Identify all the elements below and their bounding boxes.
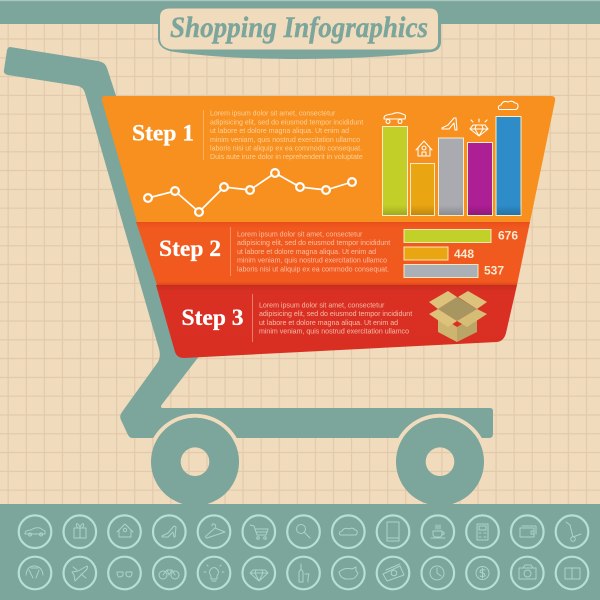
icon: magnifier bbox=[287, 515, 320, 548]
icon: camera bbox=[511, 557, 544, 589]
horizontal bar chart: 448 bbox=[454, 247, 474, 261]
step 1 text: minim veniam, quis nostrud exercitation ullamco bbox=[210, 137, 360, 144]
step 3 text: ut labore et dolore magna aliqua. Ut enim ad bbox=[259, 320, 398, 327]
icon: shoe bbox=[153, 515, 186, 548]
icon: wallet bbox=[511, 515, 544, 548]
step 1 heading: Step 1 bbox=[132, 120, 194, 146]
panel: step 1 bbox=[102, 96, 555, 222]
icon: clock bbox=[422, 557, 454, 589]
line chart bbox=[144, 169, 356, 216]
step 3 text: adipisicing elit, sed do eiusmod tempor incididunt bbox=[259, 311, 412, 318]
top banner band bbox=[0, 0, 600, 24]
icon: cloud bbox=[498, 101, 518, 110]
step 1 text: Duis aute irure dolor in reprehenderit in voluptate bbox=[210, 154, 363, 161]
step 1 text: adipisicing elit, sed do eiusmod tempor incididunt bbox=[210, 119, 363, 126]
shopping cart silhouette bbox=[4, 47, 493, 508]
icon: cloud bbox=[332, 515, 365, 548]
panel: step 3 bbox=[156, 285, 517, 358]
icon: bottle and glasses bbox=[287, 557, 320, 589]
left wheel bbox=[151, 418, 239, 506]
icon: parachute bbox=[19, 557, 51, 589]
step 1 text: laboris nisi ut aliquip ex ea commodo consequat. bbox=[210, 146, 362, 152]
icon: hand truck bbox=[556, 515, 588, 548]
icon: banknotes bbox=[377, 557, 409, 589]
icon: car bbox=[19, 515, 51, 548]
step 3 text: Lorem ipsum dolor sit amet, consectetur bbox=[259, 302, 385, 310]
icon: bicycle bbox=[153, 557, 186, 589]
icon: calculator bbox=[466, 515, 499, 548]
icon: shopping cart bbox=[242, 515, 275, 548]
step 2 text: ut labore et dolore magna aliqua. Ut enim ad bbox=[237, 249, 376, 256]
horizontal bar chart bbox=[404, 228, 518, 278]
horizontal bar chart: 537 bbox=[484, 264, 504, 278]
footer icon band bbox=[0, 504, 600, 600]
step 2 text: minim veniam, quis nostrud exercitation ullamco bbox=[237, 258, 387, 265]
step 2 heading: Step 2 bbox=[159, 236, 221, 262]
icon: piggy bank bbox=[332, 557, 365, 589]
icon: house bbox=[108, 515, 141, 548]
panel: step 2 bbox=[136, 222, 530, 285]
icon: dollar coin bbox=[466, 557, 499, 589]
step 2 text: adipisicing elit, sed do eiusmod tempor incididunt bbox=[237, 240, 390, 247]
icon: house bbox=[416, 141, 432, 156]
title text: Shopping Infographics bbox=[170, 11, 428, 44]
icon: shoe bbox=[442, 118, 457, 130]
icon row 2 bbox=[19, 557, 588, 589]
icon row 1 bbox=[19, 515, 588, 548]
right wheel bbox=[396, 418, 484, 506]
icon: hanger bbox=[198, 515, 230, 548]
step 3 text: minim veniam, quis nostrud exercitation ullamco bbox=[259, 329, 409, 336]
icon: car bbox=[384, 113, 406, 123]
icon: open book bbox=[556, 557, 588, 589]
icon: tablet bbox=[377, 515, 409, 548]
step 1 text: Lorem ipsum dolor sit amet, consectetur bbox=[210, 111, 336, 118]
title plaque bbox=[158, 8, 441, 59]
icon: diamond bbox=[242, 557, 275, 589]
icon: sunglasses bbox=[108, 557, 141, 589]
step 1 text: ut labore et dolore magna aliqua. Ut enim ad bbox=[210, 128, 349, 135]
step 2 text: laboris nisi ut aliquip ex ea commodo consequat. bbox=[237, 266, 389, 273]
step 3 heading: Step 3 bbox=[182, 305, 244, 331]
step 2 text: Lorem ipsum dolor sit amet, consectetur bbox=[237, 232, 363, 238]
icon: light bulb bbox=[198, 557, 230, 589]
icon: coffee cup bbox=[422, 515, 454, 548]
icon: gift bbox=[64, 515, 96, 548]
column chart bbox=[382, 101, 521, 216]
bar values: 676 bbox=[498, 228, 518, 242]
icon: airplane bbox=[64, 557, 96, 589]
icon: cardboard box bbox=[429, 291, 487, 342]
icon: diamond bbox=[470, 119, 488, 136]
